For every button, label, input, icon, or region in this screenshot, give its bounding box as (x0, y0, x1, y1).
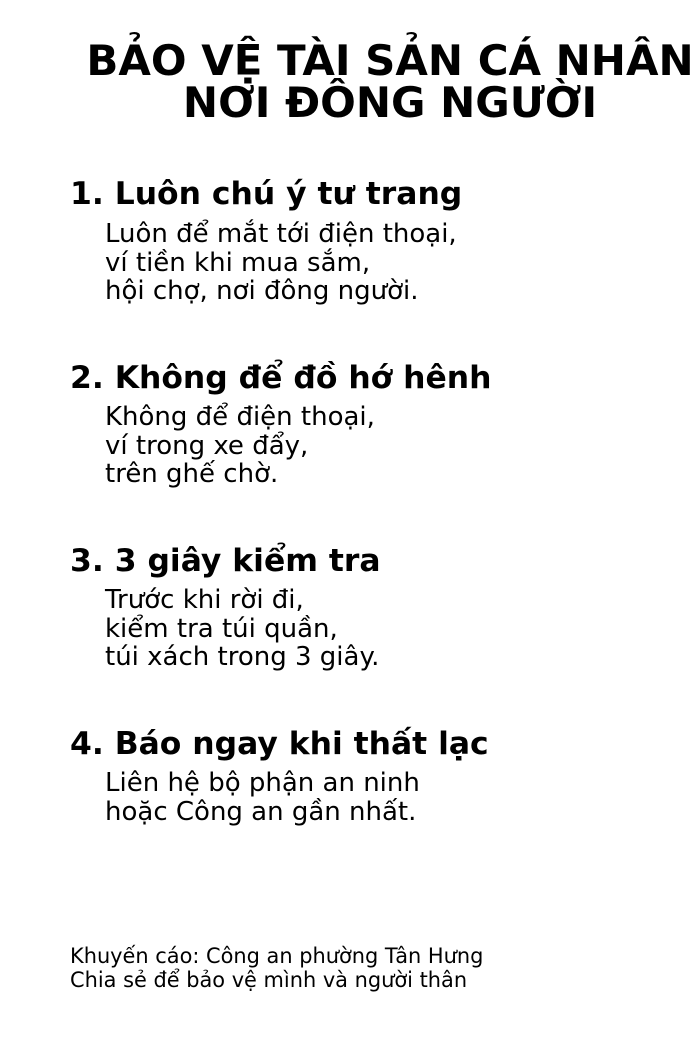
text 1: hội chợ, nơi đông người. (105, 276, 418, 306)
heading 3: 3. 3 giây kiểm tra (70, 543, 381, 579)
heading 1: 1. Luôn chú ý tư trang (70, 176, 462, 212)
title: NƠI ĐÔNG NGƯỜI (183, 78, 597, 127)
text 3: túi xách trong 3 giây. (105, 642, 379, 672)
text 3: kiểm tra túi quần, (105, 614, 338, 644)
title: BẢO VỆ TÀI SẢN CÁ NHÂN (86, 36, 694, 85)
text 1: ví tiền khi mua sắm, (105, 248, 370, 278)
text 2 (105, 402, 375, 489)
footer (70, 944, 483, 992)
text 4: Liên hệ bộ phận an ninh (105, 768, 420, 798)
footer: Khuyến cáo: Công an phường Tân Hưng (70, 944, 483, 968)
title (86, 32, 694, 127)
text 3 (104, 585, 379, 672)
text 3: Trước khi rời đi, (105, 585, 304, 615)
heading 4: 4. Báo ngay khi thất lạc (70, 726, 489, 762)
text 2: trên ghế chờ. (105, 459, 278, 489)
text 4 (105, 768, 420, 826)
text 4: hoặc Công an gần nhất. (105, 796, 416, 826)
text 1: Luôn để mắt tới điện thoại, (105, 219, 457, 249)
text 2: Không để điện thoại, (105, 402, 375, 432)
text 1 (105, 219, 457, 306)
text 2: ví trong xe đẩy, (105, 430, 308, 460)
footer: Chia sẻ để bảo vệ mình và người thân (70, 968, 467, 992)
heading 2: 2. Không để đồ hớ hênh (70, 360, 492, 396)
